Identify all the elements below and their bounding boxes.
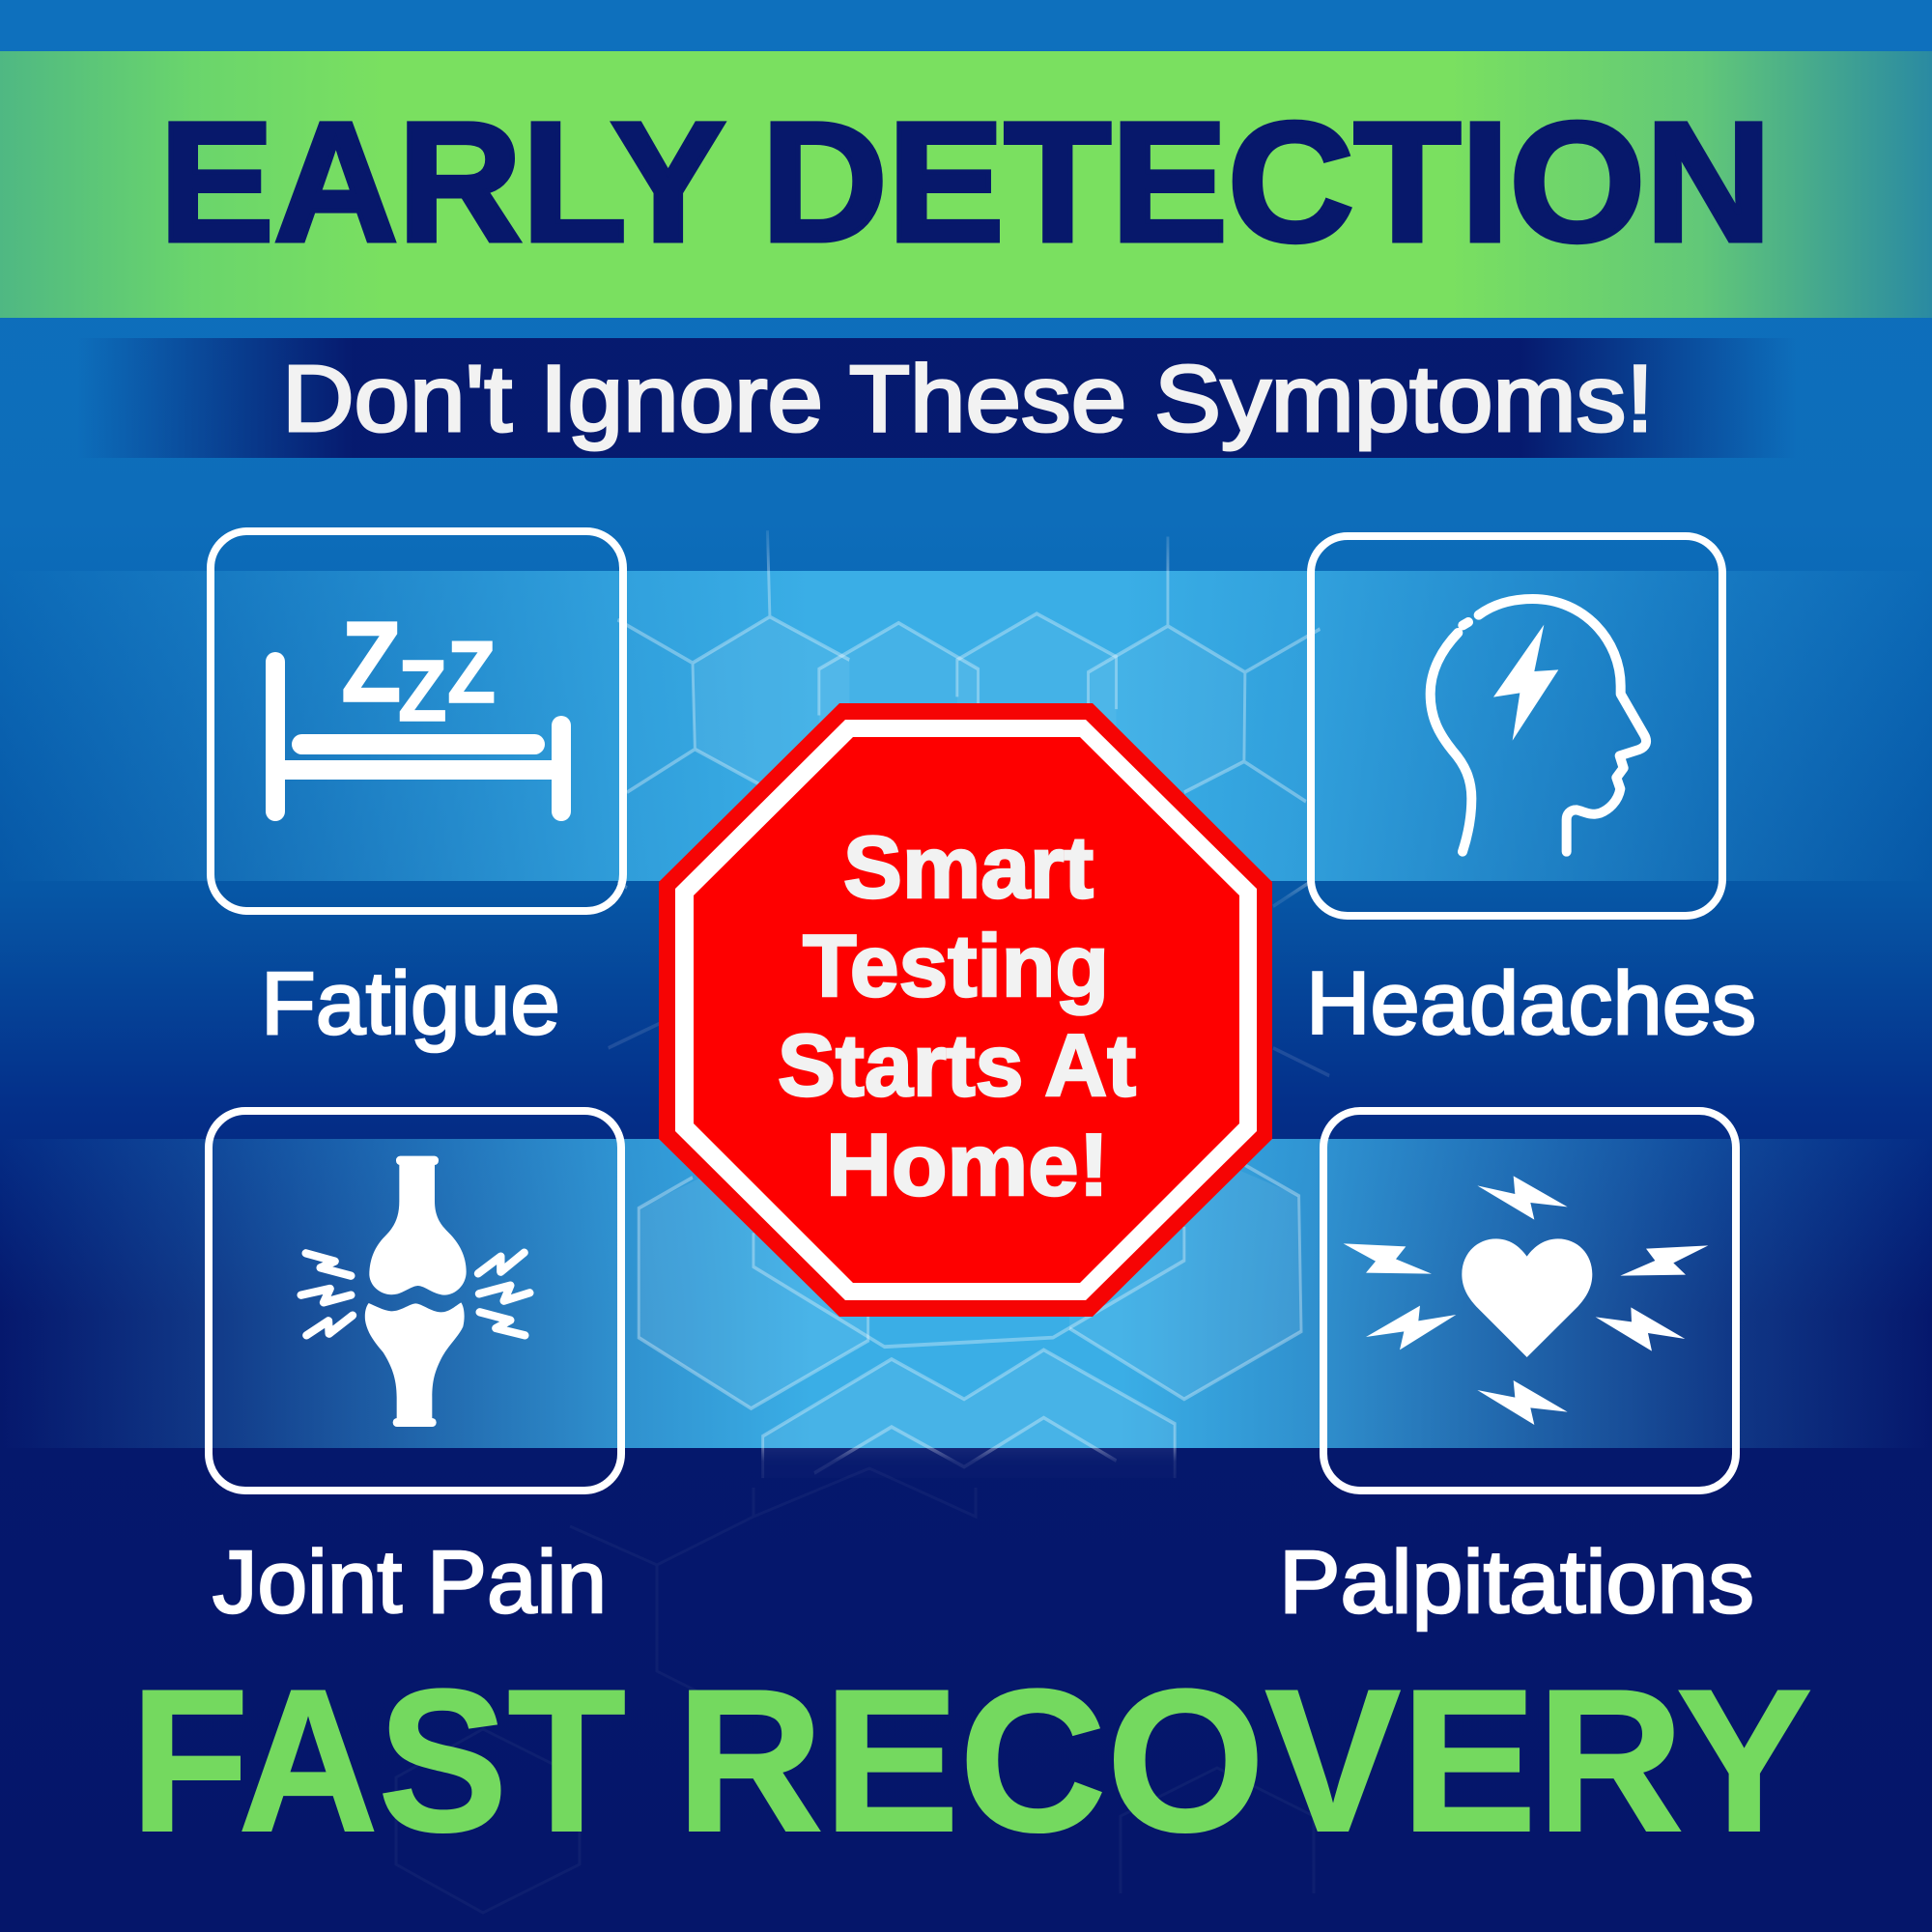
icon: zzz [341,598,496,740]
panel: headaches [1311,536,1722,916]
stop sign [659,703,1272,1317]
stop sign text: Home! [826,1117,1109,1214]
icon: head with lightning [1431,599,1646,852]
faint lower hexagons [396,1468,1314,1913]
title: early detection: EARLY [159,88,725,277]
label: palpitations: Palpitations [1279,1533,1754,1632]
title: early detection: DETECTION [761,88,1772,277]
stop sign text: Testing [803,918,1109,1015]
label: joint pain: Joint Pain [213,1533,607,1632]
panel: joint pain [209,1111,621,1491]
panel: fatigue [211,531,623,911]
headline: fast recovery: FAST [130,1647,626,1874]
icon: heart with bolts [1344,1176,1708,1425]
icon: zzz: Z [398,643,447,740]
title band [0,51,1932,318]
icon: bed [266,652,571,821]
hexagon pattern [609,530,1329,1478]
panel: palpitations [1323,1111,1736,1491]
subtitle band [77,338,1797,458]
icon: knee joint [301,1156,529,1427]
label: headaches: Headaches [1306,954,1756,1053]
light band lower [0,1139,1932,1448]
icon: zzz: Z [447,624,496,722]
icon: zzz: Z [341,598,402,726]
stop sign text: Smart [843,819,1094,917]
stop sign text: Starts At [778,1017,1136,1115]
label: fatigue: Fatigue [261,954,560,1053]
light band upper [0,571,1932,881]
subtitle: Don't Ignore These Symptoms! [282,346,1654,451]
stop sign text [778,819,1136,1214]
headline: fast recovery: RECOVERY [676,1647,1812,1874]
